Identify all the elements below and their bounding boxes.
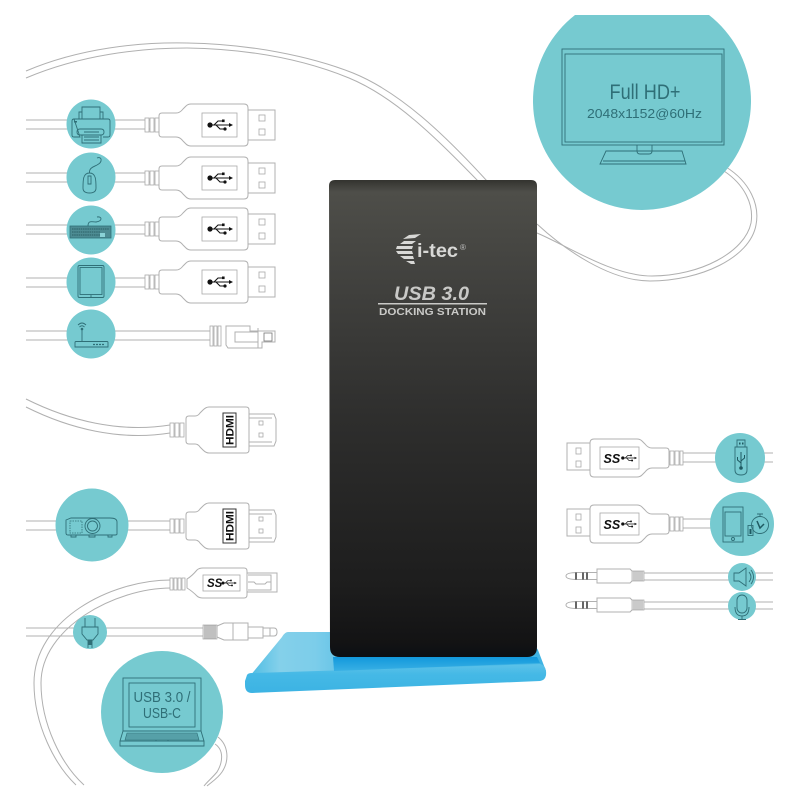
monitor label: 2048x1152@60Hz [587, 106, 702, 121]
icon: flash drive [715, 433, 765, 483]
dock body [329, 180, 537, 657]
blue stand [245, 632, 546, 693]
i-tec logo [396, 234, 466, 264]
divider under heading [378, 303, 487, 304]
docking station label: DOCKING STATION [379, 307, 486, 318]
long cable to monitor port [26, 43, 487, 181]
icon: tablet [66, 258, 116, 306]
row: smartphone charging [567, 492, 774, 556]
row: USB flash drive [567, 433, 773, 483]
i-tec logo: ® [460, 243, 466, 252]
HDMI logo: HDMI [224, 511, 236, 541]
monitor label: Full HD+ [610, 81, 680, 104]
cable from monitor circle to dock [537, 167, 757, 281]
row: mouse USB [26, 152, 275, 202]
row: speaker jack [566, 563, 773, 591]
USB 3.0 heading: USB 3.0 [394, 284, 469, 305]
row: HDMI cable [26, 399, 276, 453]
row: microphone jack [566, 592, 773, 620]
row: tablet USB [26, 258, 275, 306]
row: printer USB [26, 100, 275, 148]
HDMI logo: HDMI [224, 415, 236, 445]
icon: power plug [73, 615, 107, 649]
icon: keyboard [66, 206, 116, 254]
icon: speaker [728, 563, 756, 591]
icon: monitor [562, 49, 724, 164]
SS logo: SS [604, 518, 621, 532]
icon: router [66, 310, 116, 358]
row: USB 3.0 B cable to laptop [34, 568, 277, 785]
laptop label: USB 3.0 / [134, 690, 191, 706]
laptop label [134, 690, 191, 722]
laptop label: USB-C [143, 706, 181, 722]
icon: printer [66, 100, 116, 148]
DC plug [203, 623, 277, 640]
SS logo: SS [604, 452, 621, 466]
icon: laptop [120, 678, 204, 746]
USB 3.0 type-B plug [170, 568, 277, 598]
i-tec logo: i-tec [417, 241, 458, 262]
circle: laptop USB 3.0 / USB-C [101, 651, 227, 786]
row: keyboard USB [26, 206, 275, 254]
monitor label [587, 81, 702, 121]
docking station [245, 180, 546, 693]
icon: microphone [728, 592, 756, 620]
SS logo: SS [207, 578, 223, 590]
row: router RJ45 [26, 310, 275, 358]
icon: mouse [66, 152, 116, 202]
icon: phone and charge timer [710, 492, 774, 556]
icon: projector [56, 488, 128, 562]
circle: monitor Full HD+ [533, 15, 751, 210]
row: DC power [26, 615, 277, 649]
row: projector HDMI [26, 488, 276, 562]
icon: RJ45 plug [210, 326, 275, 348]
